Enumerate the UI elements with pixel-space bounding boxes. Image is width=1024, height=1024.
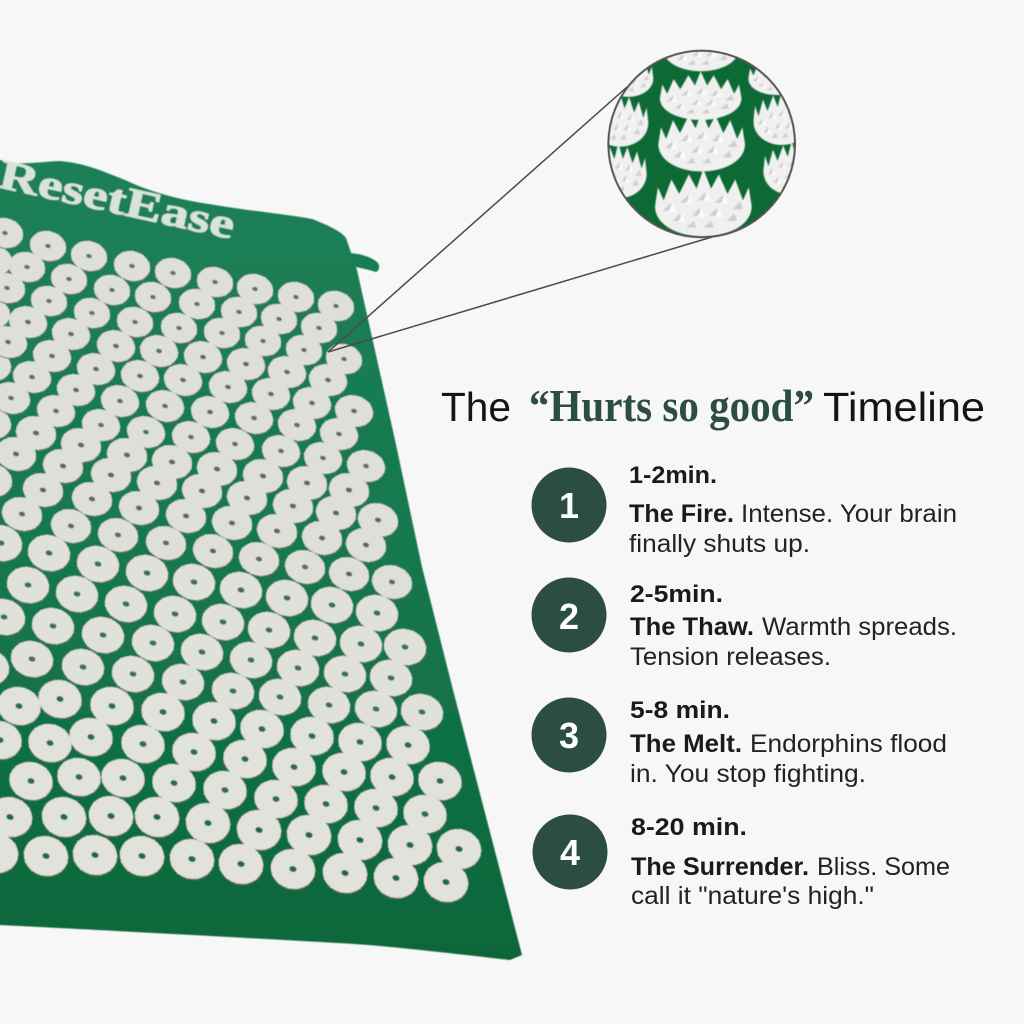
number badge 1: [532, 468, 606, 542]
number badge 2: [532, 578, 606, 652]
step 2 text: Tension releases.: [630, 643, 831, 671]
step 4 text: 8-20 min.: [631, 814, 747, 841]
step 4 text: The Surrender.: [631, 853, 809, 881]
step 2 text: The Thaw.: [630, 613, 754, 641]
callout lines from mat to magnifier: [328, 87, 712, 352]
number badge 1: 1: [559, 485, 579, 526]
step 4 text: call it "nature's high.": [631, 882, 874, 910]
step 3 text: in. You stop fighting.: [630, 760, 866, 788]
mat fabric: [0, 156, 522, 960]
magnifier circle: close-up of pins: [607, 50, 796, 239]
step 1 text: finally shuts up.: [629, 530, 810, 558]
step 1 text: 1-2min.: [629, 462, 717, 489]
logo text: ResetEase: [0, 152, 239, 249]
timeline step 2: [532, 578, 957, 671]
step 2 text: Warmth spreads.: [762, 613, 957, 641]
timeline step 1: [532, 462, 957, 558]
step 4 text: [631, 814, 950, 910]
step 3 text: [630, 697, 947, 788]
number badge 3: [532, 698, 606, 772]
timeline step 3: [532, 697, 947, 788]
timeline step 4: [532, 814, 950, 910]
number badge 4: 4: [560, 832, 580, 873]
rows of white pin discs: [0, 214, 486, 908]
title: The: [441, 384, 511, 430]
step 1 text: The Fire.: [629, 500, 734, 528]
step 3 text: Endorphins flood: [750, 730, 947, 758]
mat hanging loop: [350, 253, 379, 272]
number badge 3: 3: [559, 715, 579, 756]
title: [441, 380, 985, 431]
title: Timeline: [823, 384, 985, 430]
step 3 text: The Melt.: [630, 730, 742, 758]
step 1 text: [629, 462, 957, 558]
number badge 4: [532, 814, 608, 890]
step 4 text: Bliss. Some: [817, 853, 950, 881]
step 2 text: [630, 581, 957, 671]
step 3 text: 5-8 min.: [630, 697, 730, 724]
step 2 text: 2-5min.: [630, 581, 723, 608]
title: “Hurts so good”: [529, 380, 814, 431]
number badge 2: 2: [559, 596, 579, 637]
step 1 text: Intense. Your brain: [741, 500, 957, 528]
acupressure mat: [0, 152, 522, 960]
